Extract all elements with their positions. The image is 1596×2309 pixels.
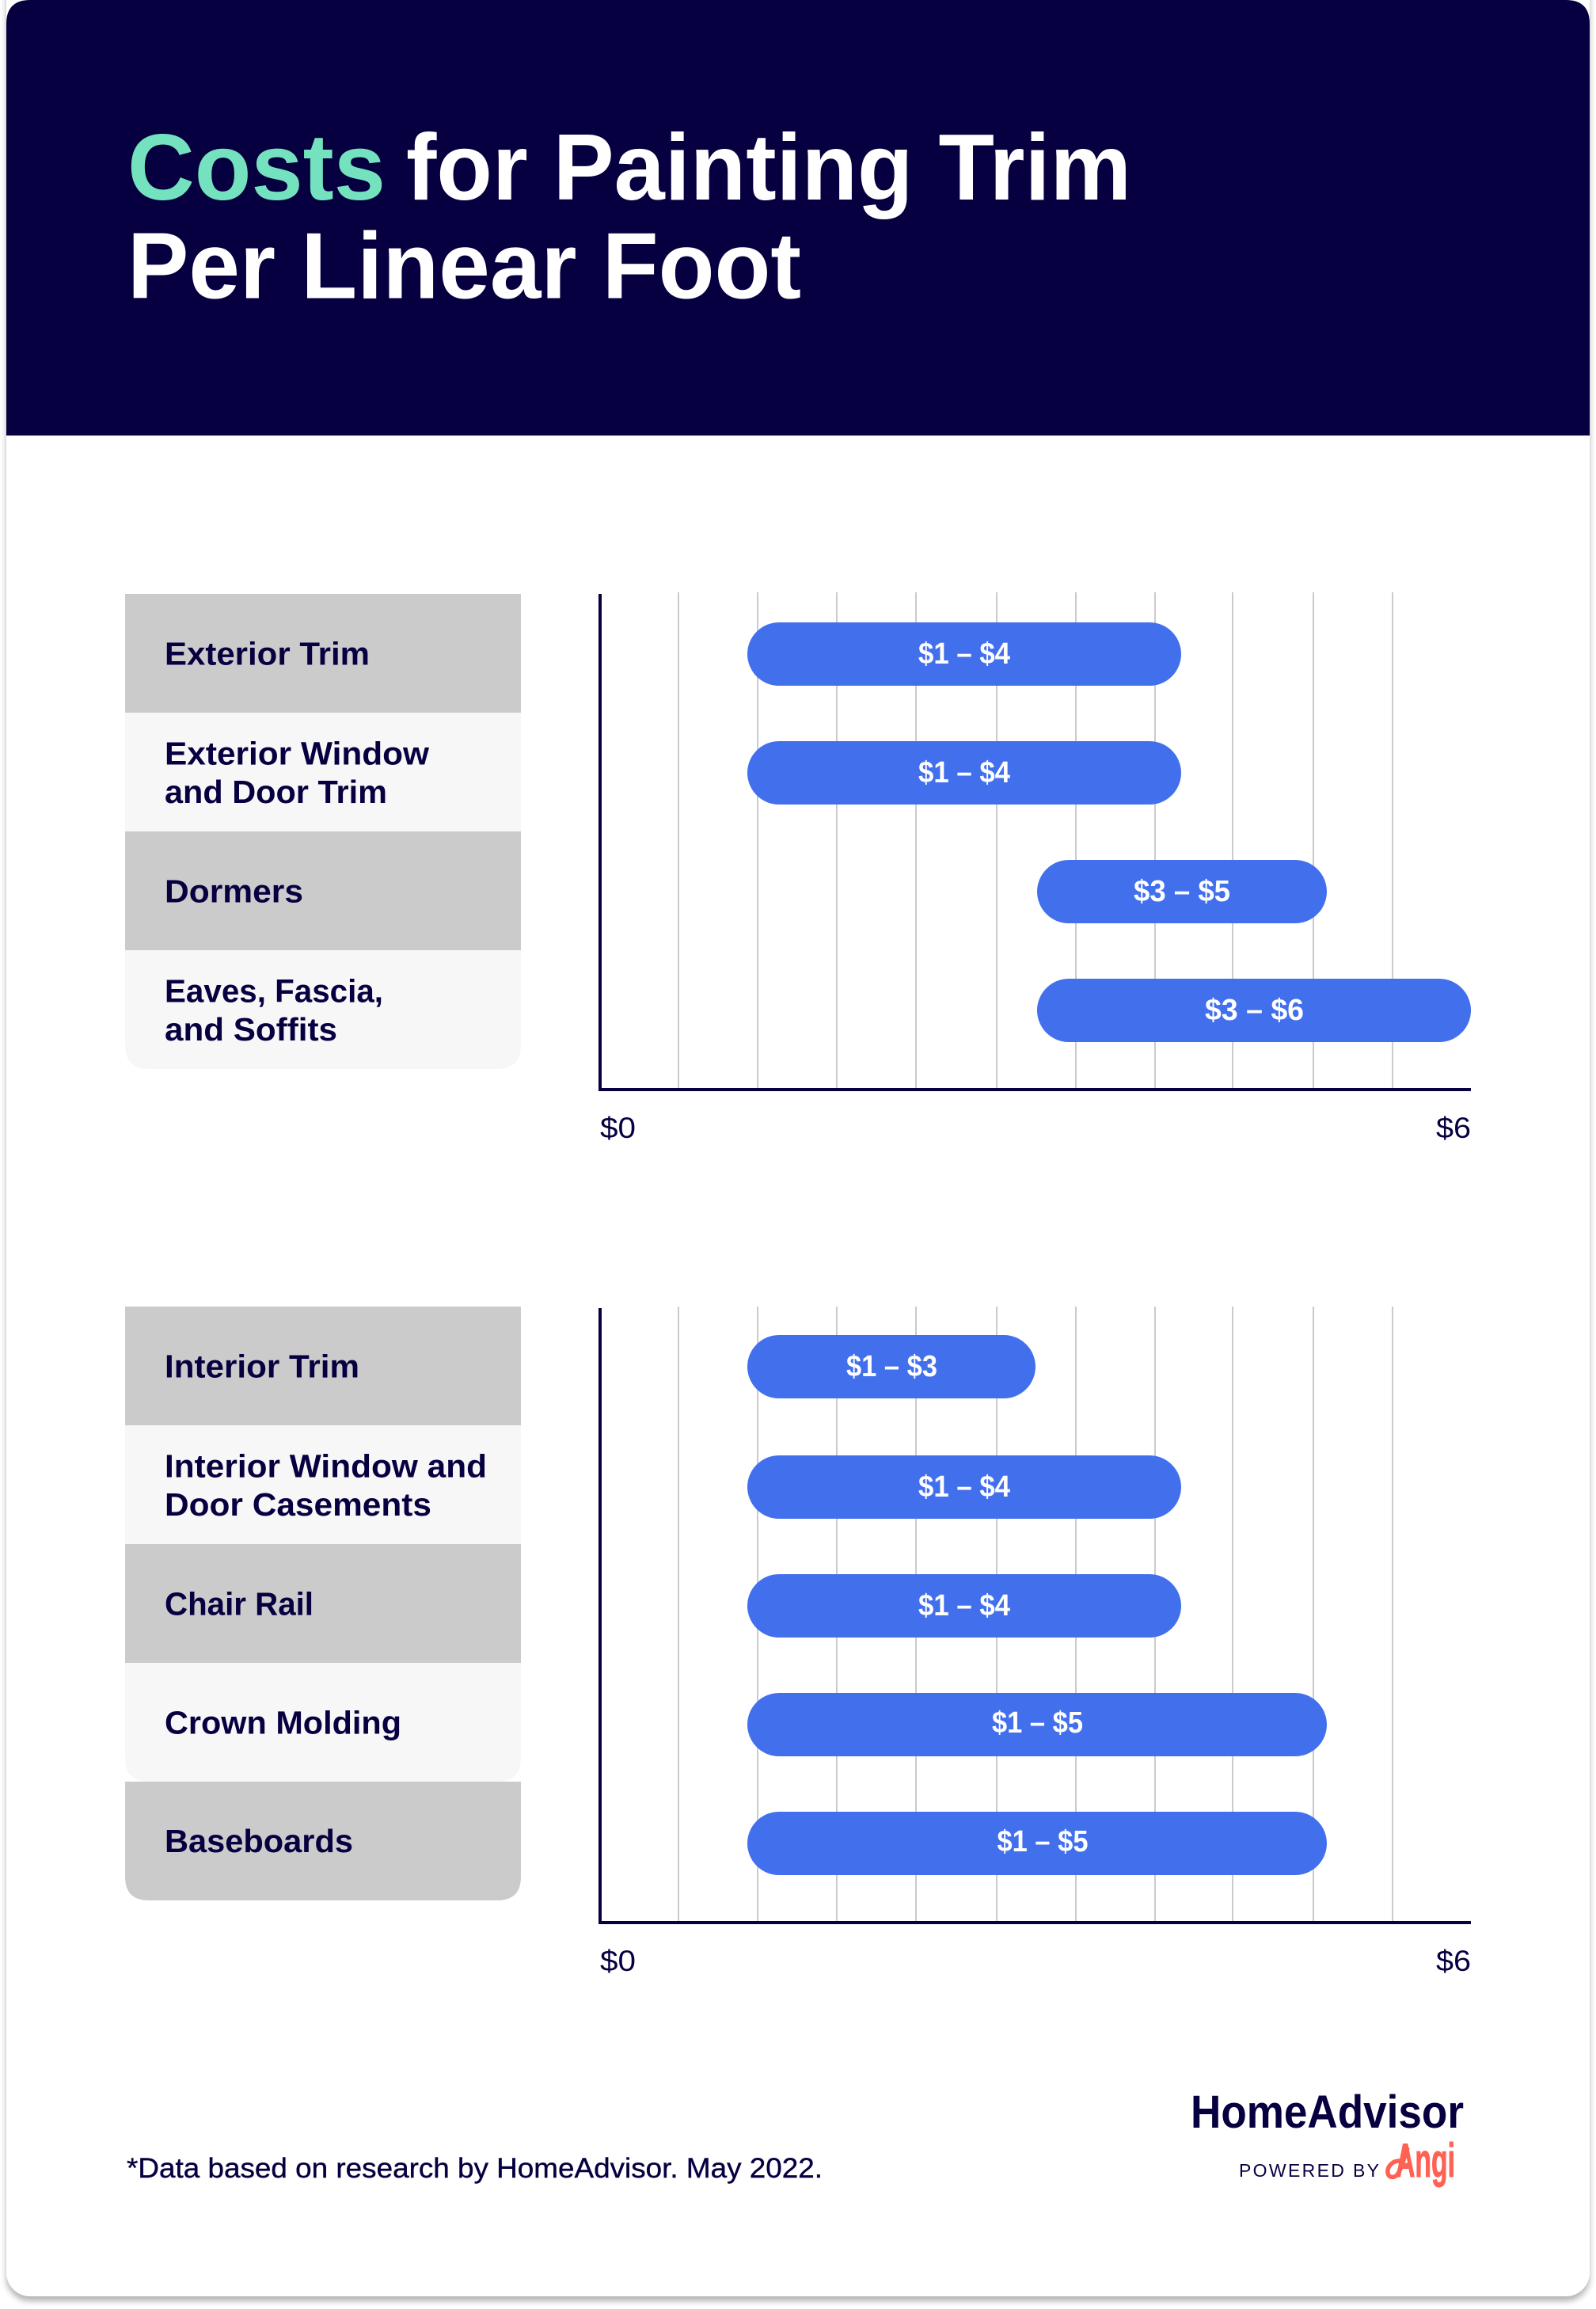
- exterior range chart: [598, 592, 1471, 1144]
- interior range chart: $1 – $5: [998, 1825, 1088, 1858]
- interior category labels: Door Casements: [165, 1486, 431, 1523]
- exterior range chart: $3 – $6: [1205, 994, 1304, 1027]
- interior range chart: [598, 1307, 1471, 1977]
- interior range chart: $1 – $3: [846, 1350, 937, 1383]
- logo: HomeAdvisor powered by Angi: [1191, 2086, 1464, 2187]
- interior range chart: $1 – $5: [992, 1706, 1083, 1740]
- interior category labels: [125, 1307, 521, 1900]
- exterior category labels: Exterior Trim: [165, 635, 370, 671]
- logo: HomeAdvisor powered by Angi: HomeAdvisor: [1191, 2086, 1464, 2138]
- interior category labels: Interior Trim: [165, 1348, 359, 1384]
- exterior range chart: $1 – $4: [918, 756, 1010, 789]
- panel: interior chart: [125, 1307, 1471, 1977]
- panel: header: [6, 0, 1590, 436]
- interior range chart: $0: [600, 1945, 636, 1977]
- exterior category labels: and Door Trim: [165, 774, 387, 810]
- interior category labels: Baseboards: [165, 1823, 353, 1859]
- logo: HomeAdvisor powered by Angi: POWERED BY: [1239, 2160, 1379, 2181]
- exterior range chart: $6: [1436, 1112, 1471, 1144]
- exterior range chart: $0: [600, 1112, 636, 1144]
- exterior category labels: Exterior Window: [165, 735, 429, 771]
- interior range chart: $1 – $4: [918, 1589, 1010, 1622]
- interior range chart: $6: [1436, 1945, 1471, 1977]
- exterior range chart: $1 – $4: [918, 637, 1010, 671]
- logo: HomeAdvisor powered by Angi: Angi: [1396, 2134, 1455, 2187]
- title: [127, 115, 1131, 318]
- interior category labels: Chair Rail: [165, 1585, 314, 1622]
- exterior category labels: Eaves, Fascia,: [165, 972, 383, 1009]
- title: for Painting Trim: [406, 115, 1131, 220]
- footnote: *Data based on research by HomeAdvisor. May 2022.: [127, 2153, 823, 2184]
- interior range chart: $1 – $4: [918, 1470, 1010, 1504]
- interior category labels: Crown Molding: [165, 1704, 401, 1740]
- title: Per Linear Foot: [127, 214, 801, 318]
- exterior category labels: and Soffits: [165, 1011, 337, 1048]
- exterior category labels: [125, 594, 521, 1069]
- interior category labels: Interior Window and: [165, 1447, 487, 1484]
- title: Costs: [127, 115, 386, 220]
- exterior category labels: Dormers: [165, 873, 303, 909]
- exterior range chart: $3 – $5: [1134, 875, 1230, 908]
- panel: exterior chart: [125, 592, 1471, 1144]
